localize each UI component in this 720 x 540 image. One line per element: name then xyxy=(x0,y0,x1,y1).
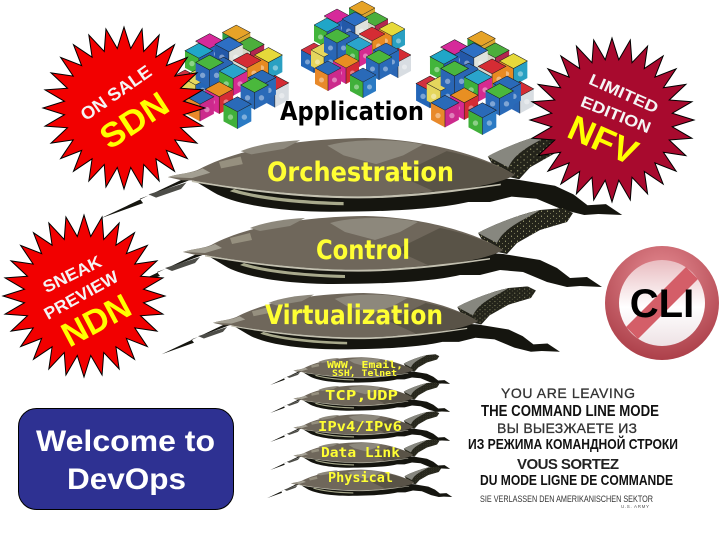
notice: you are leaving: ВЫ ВЫЕЗЖАЕТЕ ИЗ xyxy=(497,420,637,436)
starburst: NFV limited edition: NFV xyxy=(562,108,644,173)
label: www email: WWW, Email, xyxy=(327,359,403,371)
callout: welcome to DevOps xyxy=(18,408,234,510)
notice: you are leaving: THE COMMAND LINE MODE xyxy=(481,403,659,420)
starburst: NDN sneak preview: PREVIEW xyxy=(41,267,123,324)
icon: app cubes left xyxy=(171,25,289,129)
turtle: link layer xyxy=(270,439,450,470)
notice: you are leaving xyxy=(468,385,678,509)
icon: no CLI sign: CLI xyxy=(630,282,694,326)
starburst: NFV limited edition: EDITION xyxy=(578,94,653,137)
turtle: virtualization xyxy=(162,286,560,354)
starburst: NFV limited edition xyxy=(530,38,694,202)
icon: no CLI sign xyxy=(605,246,719,360)
label: data link: Data Link xyxy=(321,446,400,461)
label: virtualization: Virtualization xyxy=(265,300,443,331)
starburst: NFV limited edition: LIMITED xyxy=(586,72,661,117)
protocol stack of small turtles xyxy=(267,354,452,498)
callout: welcome to DevOps: Welcome to xyxy=(36,425,215,458)
icon: app cubes center xyxy=(301,1,411,98)
notice: you are leaving: VOUS SORTEZ xyxy=(517,456,619,473)
turtle: network layer xyxy=(270,411,450,442)
notice: you are leaving: YOU ARE LEAVING xyxy=(501,385,635,401)
starburst: NDN sneak preview: NDN xyxy=(55,287,138,355)
starburst: NDN sneak preview: SNEAK xyxy=(40,252,105,297)
turtle: control xyxy=(121,208,602,290)
notice: you are leaving: U.S. ARMY xyxy=(621,504,649,509)
notice: you are leaving: DU MODE LIGNE DE COMMANDE xyxy=(480,472,673,489)
label: orchestration: Orchestration xyxy=(267,157,454,188)
callout: welcome to DevOps: DevOps xyxy=(67,463,186,496)
label: ssh telnet: SSH, Telnet xyxy=(332,369,397,379)
turtle: orchestration xyxy=(101,129,622,218)
turtle: transport layer xyxy=(270,382,450,413)
label: tcp udp: TCP,UDP xyxy=(325,389,398,404)
notice: you are leaving: SIE VERLASSEN DEN AMERIKANISCHEN SEKTOR xyxy=(480,494,653,505)
turtle: physical layer xyxy=(267,467,452,498)
icon: app cubes right xyxy=(416,31,534,135)
starburst: SDN on sale: SDN xyxy=(93,85,176,157)
label: control: Control xyxy=(316,235,410,266)
label: physical: Physical xyxy=(328,471,393,486)
starburst: SDN on sale xyxy=(43,27,205,189)
turtle: application layer xyxy=(270,354,450,385)
starburst: SDN on sale: ON SALE xyxy=(77,61,155,125)
heading: application: Application xyxy=(280,97,424,127)
label: ipv4 ipv6: IPv4/IPv6 xyxy=(318,420,402,435)
starburst: NDN sneak preview xyxy=(3,215,165,377)
